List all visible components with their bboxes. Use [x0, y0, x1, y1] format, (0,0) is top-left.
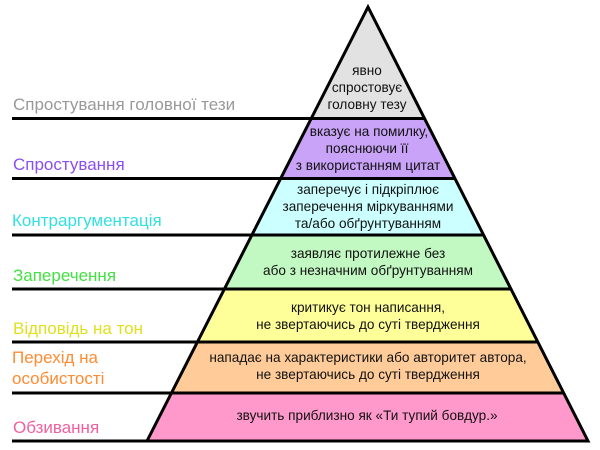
band: contradiction [225, 235, 511, 289]
text: cyan band: заперечує і підкріплює [297, 182, 439, 197]
band: explicit refutation of central point [312, 7, 425, 118]
band: name-calling [147, 393, 588, 441]
label: Контраргументація: Контраргументація [12, 211, 162, 230]
text: cyan band: та/або обґрунтуванням [295, 216, 441, 231]
text: pink band: звучить приблизно як «Ти тупий бовдур.» [236, 408, 498, 423]
pyramid [147, 7, 588, 441]
text: purple band: пояснюючи її [326, 141, 409, 156]
text: purple band: вказує на помилку, [310, 124, 428, 139]
label: Заперечення: Заперечення [13, 266, 116, 285]
band: ad hominem [172, 342, 563, 393]
label: Перехід на особистості: Перехід на [12, 348, 99, 367]
text: gray band: явно [352, 63, 382, 78]
label: Перехід на особистості: особистості [12, 369, 104, 388]
text: orange band: нападає на характеристики або авторитет автора, [209, 350, 527, 365]
text: purple band: з використанням цитат [296, 158, 440, 173]
text: yellow band: не звертаючись до суті твердження [256, 317, 480, 332]
band: responding to tone [198, 289, 538, 342]
label: Відповідь на тон: Відповідь на тон [13, 319, 143, 338]
text: gray band: спростовує [332, 80, 402, 95]
pyramid outline [147, 7, 588, 441]
band: counterargument [252, 178, 484, 235]
text: green band: або з незначним обґрунтуванням [263, 263, 473, 278]
label: Спростування: Спростування [13, 155, 125, 174]
text: orange band: не звертаючись до суті твердження [256, 367, 480, 382]
text: green band: заявляє протилежне без [291, 246, 445, 261]
text: gray band: головну тезу [327, 97, 407, 112]
label: Обзивання: Обзивання [13, 418, 99, 437]
band: refutation [281, 118, 455, 178]
label: Спростування головної тези: Спростування головної тези [13, 95, 235, 114]
divider lines [12, 118, 588, 441]
text: yellow band: критикує тон написання, [291, 300, 445, 315]
text: cyan band: заперечення міркуваннями [283, 199, 453, 214]
